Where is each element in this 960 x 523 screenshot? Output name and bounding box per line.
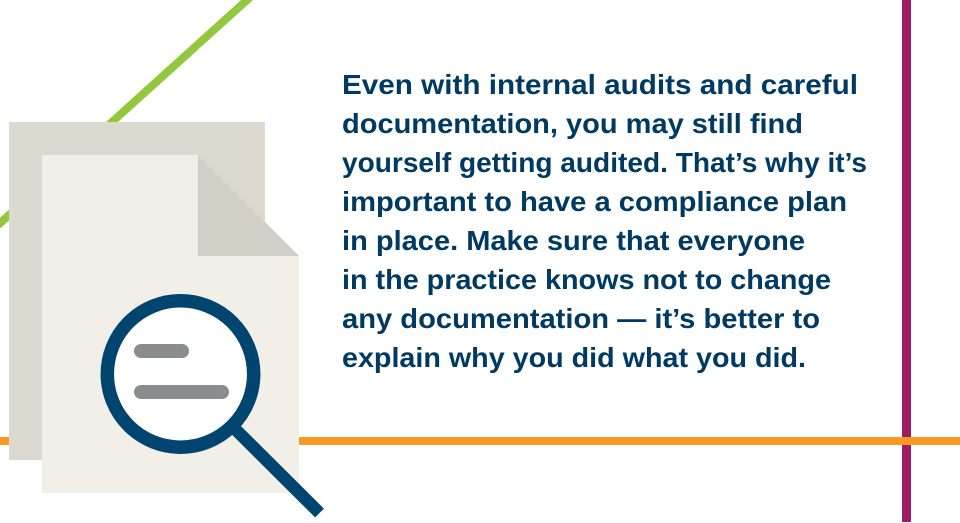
body text: in place. Make sure that everyone — [342, 225, 805, 256]
body text — [342, 69, 867, 373]
body text: yourself getting audited. That’s why it’s — [342, 147, 867, 178]
icon: magnifying glass — [107, 301, 320, 513]
icon: front document — [42, 155, 299, 493]
orange horizontal line — [0, 437, 960, 445]
green diagonal line — [0, 0, 251, 230]
body text: documentation, you may still find — [342, 108, 803, 139]
body text: any documentation — it’s better to — [342, 303, 820, 334]
purple vertical line — [902, 0, 911, 522]
body text: Even with internal audits and careful — [342, 69, 858, 100]
body text: explain why you did what you did. — [342, 342, 806, 373]
icon: document folded corner — [198, 155, 299, 256]
body text: in the practice knows not to change — [342, 264, 831, 295]
body text: important to have a compliance plan — [342, 186, 847, 217]
icon: back document — [9, 122, 265, 460]
